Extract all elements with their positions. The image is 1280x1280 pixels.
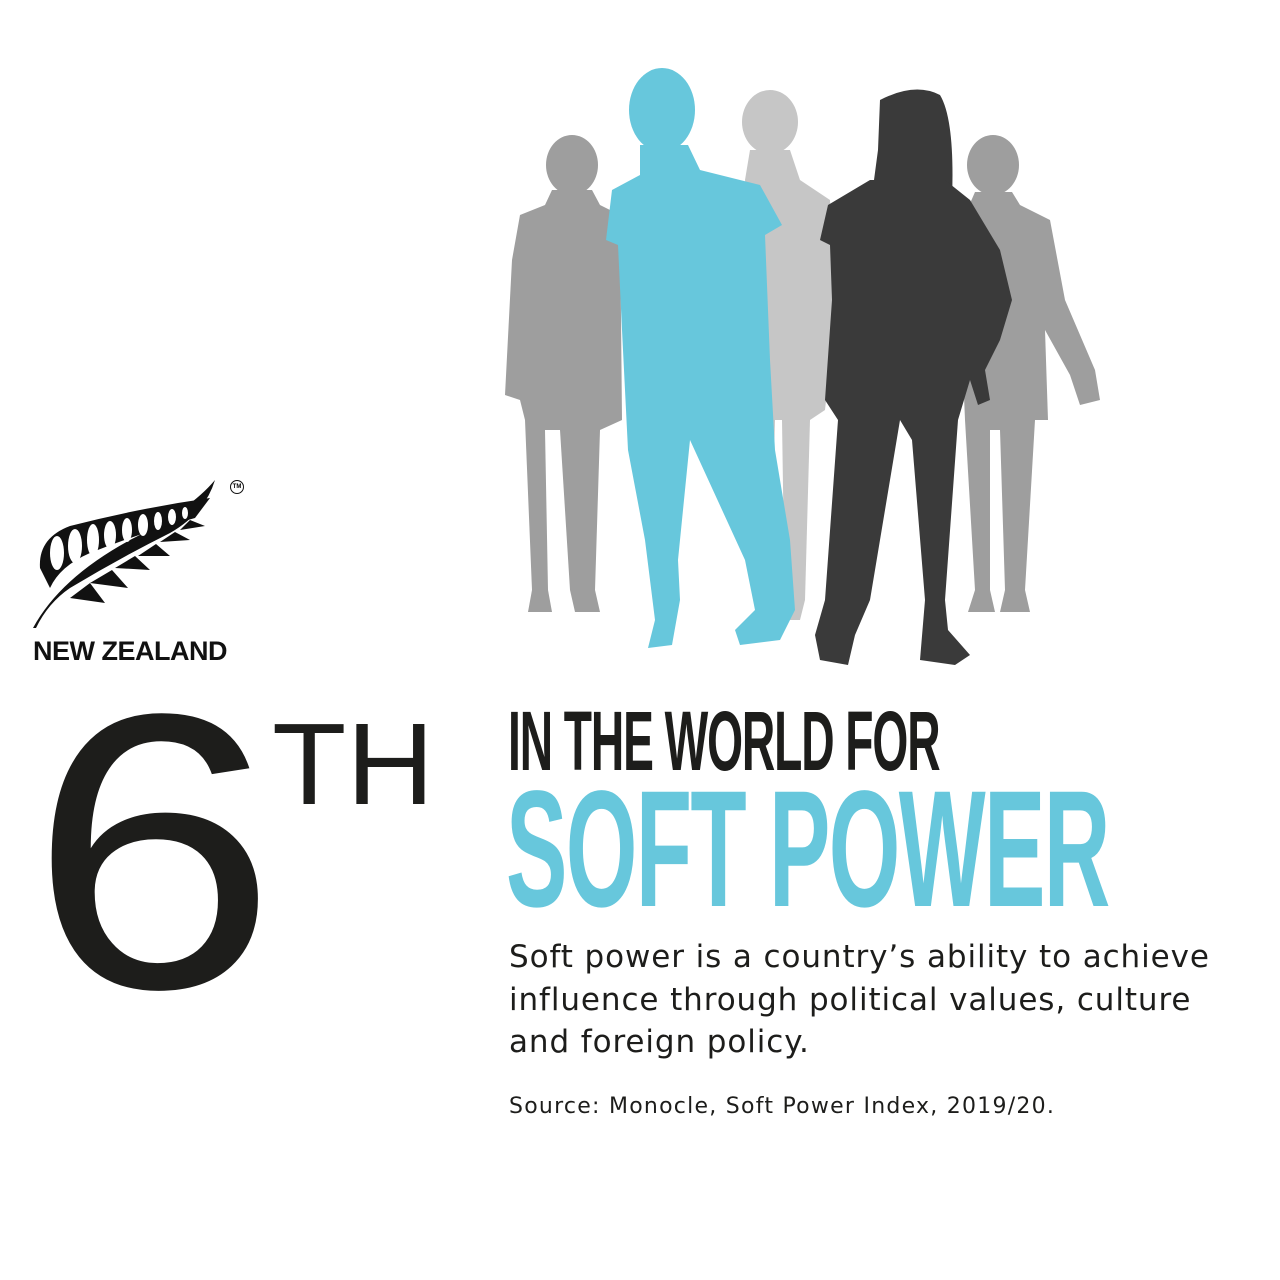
logo text: NEW ZEALAND — [33, 636, 227, 666]
trademark — [230, 480, 244, 494]
logo: New Zealand fern — [33, 480, 244, 666]
icon: fern — [33, 480, 215, 628]
figure: teal — [606, 68, 795, 648]
figures illustration — [505, 68, 1100, 665]
heading line 1: IN THE WORLD FOR — [508, 694, 940, 788]
figure: light gray back — [742, 90, 835, 620]
source: Source: Monocle, Soft Power Index, 2019/20. — [509, 1094, 1055, 1119]
figure: gray right — [960, 135, 1100, 612]
big number 6: 6 — [29, 633, 278, 1071]
superscript TH: TH — [272, 699, 434, 829]
figure: dark — [815, 90, 1012, 665]
figure: gray left — [505, 135, 622, 612]
heading line 2: SOFT POWER — [506, 757, 1109, 942]
trademark: TM — [233, 484, 241, 490]
description: Soft power is a country’s ability to achieve influence through political values, culture and foreign policy. — [509, 939, 1210, 1060]
